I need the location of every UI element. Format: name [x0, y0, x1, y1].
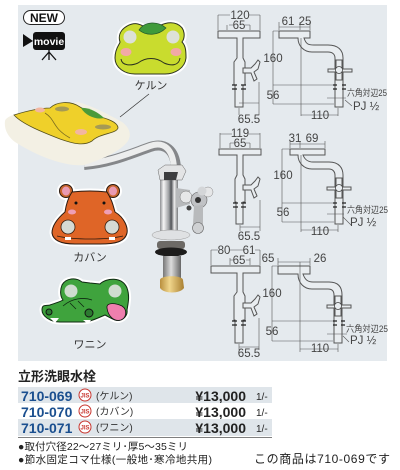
drawing: side view 1: 61	[282, 16, 294, 28]
drawing: side view 1: 110	[311, 110, 329, 122]
drawing: side view 2: 110	[311, 226, 329, 238]
label: カバン: カバン	[73, 251, 107, 264]
icon: movie camera: movie	[34, 36, 64, 48]
illustration: crocodile plate	[42, 279, 129, 324]
illustration: frog plate	[115, 23, 186, 74]
notes: specifications	[18, 440, 212, 466]
row 710-069: (ケルン)	[96, 390, 132, 402]
row 710-070: JIS	[80, 410, 90, 416]
row 710-070: 710-070	[21, 404, 73, 420]
faucet body	[152, 165, 190, 292]
drawing: side view 3: 110	[311, 343, 329, 355]
leader line	[120, 94, 149, 117]
drawing: front view 2: 65	[234, 138, 246, 150]
row 710-071: JIS	[80, 426, 90, 432]
drawing: side view 3	[262, 253, 388, 355]
row 710-071	[18, 419, 272, 436]
table: price list	[18, 387, 272, 436]
row 710-071: (ワニン)	[96, 423, 133, 434]
pipe spout	[84, 145, 176, 168]
row 710-069: JIS	[80, 394, 90, 400]
drawing: side view 2	[273, 133, 388, 238]
row 710-070: 1/-	[256, 408, 268, 419]
icon: movie camera	[23, 32, 65, 60]
row 710-071: 710-071	[21, 420, 73, 436]
drawing: side view 1: 160	[263, 53, 283, 65]
drawing: side view 1: 56	[267, 90, 279, 102]
row 710-071: ¥13,000	[195, 420, 246, 436]
drawing: front view 1	[218, 10, 260, 126]
row 710-071: 1/-	[256, 424, 268, 435]
drawing: front view 2	[219, 128, 261, 243]
drawing: side view 2: 160	[273, 170, 293, 182]
drawing: side view 2: 六角対辺25	[347, 204, 388, 215]
drawing: side view 3: PJ ½	[350, 335, 377, 347]
drawing: side view 3: 26	[314, 253, 326, 265]
drawing: side view 2: 31	[289, 133, 301, 145]
caption: this product: この商品は710-069です	[254, 452, 390, 466]
row 710-069	[18, 387, 272, 404]
drawing: front view 3: 80	[218, 245, 230, 257]
label: ケルン: ケルン	[135, 79, 167, 92]
badge: NEW: NEW	[30, 11, 59, 25]
row 710-069: ¥13,000	[195, 388, 246, 404]
cross handle	[176, 186, 213, 234]
drawing: side view 2: PJ ½	[350, 217, 377, 229]
notes: specifications: ●節水固定コマ仕様(一般地･寒冷地共用)	[18, 453, 212, 466]
drawing: front view 2: 119	[231, 128, 249, 140]
drawing: side view 1: PJ ½	[353, 101, 380, 113]
panel: product background	[18, 5, 387, 361]
label: ワニン: ワニン	[74, 339, 106, 351]
heading: product name: 立形洗眼水栓	[18, 369, 96, 384]
drawing: front view 1: 65.5	[238, 114, 260, 126]
drawing: side view 1: 25	[299, 16, 311, 28]
notes: specifications: ●取付穴径22～27ミリ･厚5～35ミリ	[18, 440, 188, 453]
photo: eye wash faucet	[5, 102, 213, 292]
plate: white base with frog face	[5, 102, 130, 165]
drawing: front view 1: 120	[230, 10, 250, 22]
badge: NEW	[24, 10, 64, 25]
drawing: side view 3: 65	[262, 253, 274, 265]
drawing: front view 2: 65.5	[238, 231, 260, 243]
drawing: side view 2: 56	[277, 207, 289, 219]
drawing: front view 3	[211, 245, 260, 360]
drawing: side view 1: 六角対辺25	[347, 87, 387, 98]
drawing: side view 3: 160	[262, 288, 282, 300]
drawing: side view 3: 56	[266, 326, 278, 338]
drawing: side view 3: 六角対辺25	[346, 323, 388, 334]
drawing: front view 1: 65	[233, 20, 245, 32]
drawing: side view 1	[263, 16, 387, 122]
drawing: front view 3: 65	[233, 255, 245, 267]
drawing: front view 3: 61	[243, 245, 255, 257]
drawing: side view 2: 69	[306, 133, 318, 145]
drawing: front view 3: 65.5	[238, 348, 260, 360]
row 710-070: ¥13,000	[195, 404, 246, 420]
illustration: hippo plate	[52, 182, 127, 244]
row 710-070: (カバン)	[96, 406, 133, 418]
row 710-070	[18, 403, 272, 420]
row 710-069: 1/-	[256, 392, 268, 403]
row 710-069: 710-069	[21, 388, 73, 404]
